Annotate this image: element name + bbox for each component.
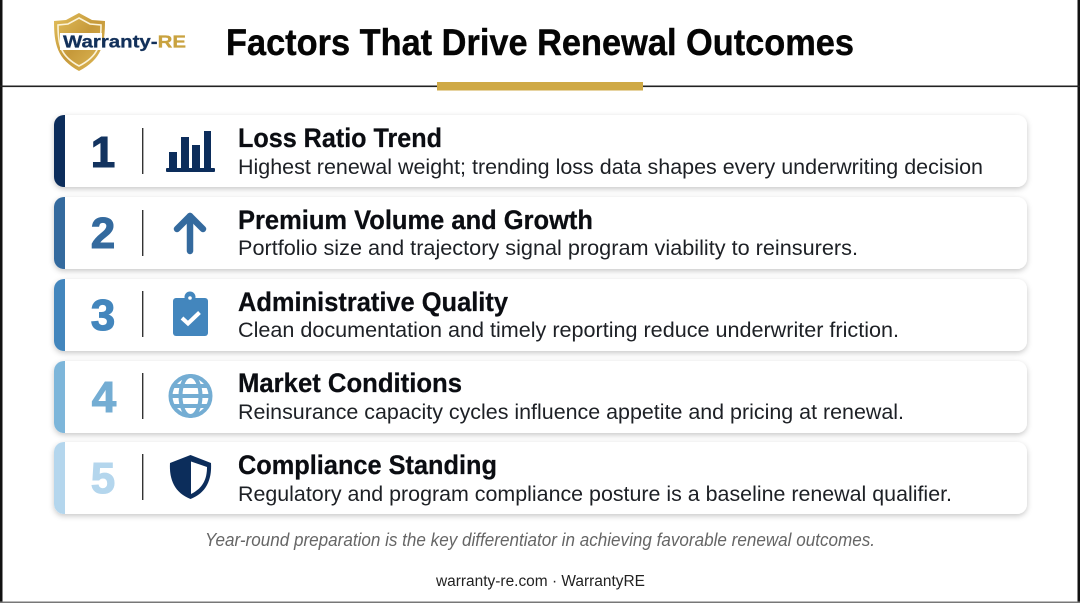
title: Factors That Drive Renewal Outcomes xyxy=(226,22,854,63)
panel: factor 2 xyxy=(54,197,1027,269)
heading: Compliance Standing xyxy=(238,450,497,480)
icon: shield xyxy=(170,455,211,499)
heading: Market Conditions xyxy=(238,368,462,398)
panel: factor 4 xyxy=(54,361,1027,433)
icon: gold shield xyxy=(54,13,105,71)
icon: clipboard check xyxy=(173,292,208,336)
heading: Premium Volume and Growth xyxy=(238,205,593,235)
wordmark: Warranty- RE xyxy=(63,32,186,52)
logo: Warranty-RE shield and wordmark xyxy=(54,13,186,71)
panel: factor 3 xyxy=(54,279,1027,351)
gold accent rule xyxy=(437,82,643,90)
description: Clean documentation and timely reporting reduce underwriter friction. xyxy=(238,318,899,342)
icon: globe xyxy=(170,376,211,416)
heading: Administrative Quality xyxy=(238,287,508,317)
number 5: 5 xyxy=(91,454,115,503)
number 4: 4 xyxy=(92,373,117,422)
description: Reinsurance capacity cycles influence appetite and pricing at renewal. xyxy=(238,400,904,424)
description: Portfolio size and trajectory signal program viability to reinsurers. xyxy=(238,236,858,260)
panel: factor 1 xyxy=(54,115,1027,187)
description: Highest renewal weight; trending loss data shapes every underwriting decision xyxy=(238,155,983,179)
panel: factor 5 xyxy=(54,442,1027,514)
icon: bar chart xyxy=(166,131,215,172)
heading: Loss Ratio Trend xyxy=(238,123,442,153)
number 2: 2 xyxy=(91,209,115,258)
description: Regulatory and program compliance posture is a baseline renewal qualifier. xyxy=(238,482,952,506)
number 3: 3 xyxy=(91,291,115,340)
footer: warranty-re.com · WarrantyRE xyxy=(435,573,645,590)
callout: closing note: Year-round preparation is the key differentiator in achieving favorable renewal outcomes. xyxy=(205,530,875,550)
number 1: 1 xyxy=(91,128,115,177)
icon: up arrow xyxy=(177,216,203,251)
